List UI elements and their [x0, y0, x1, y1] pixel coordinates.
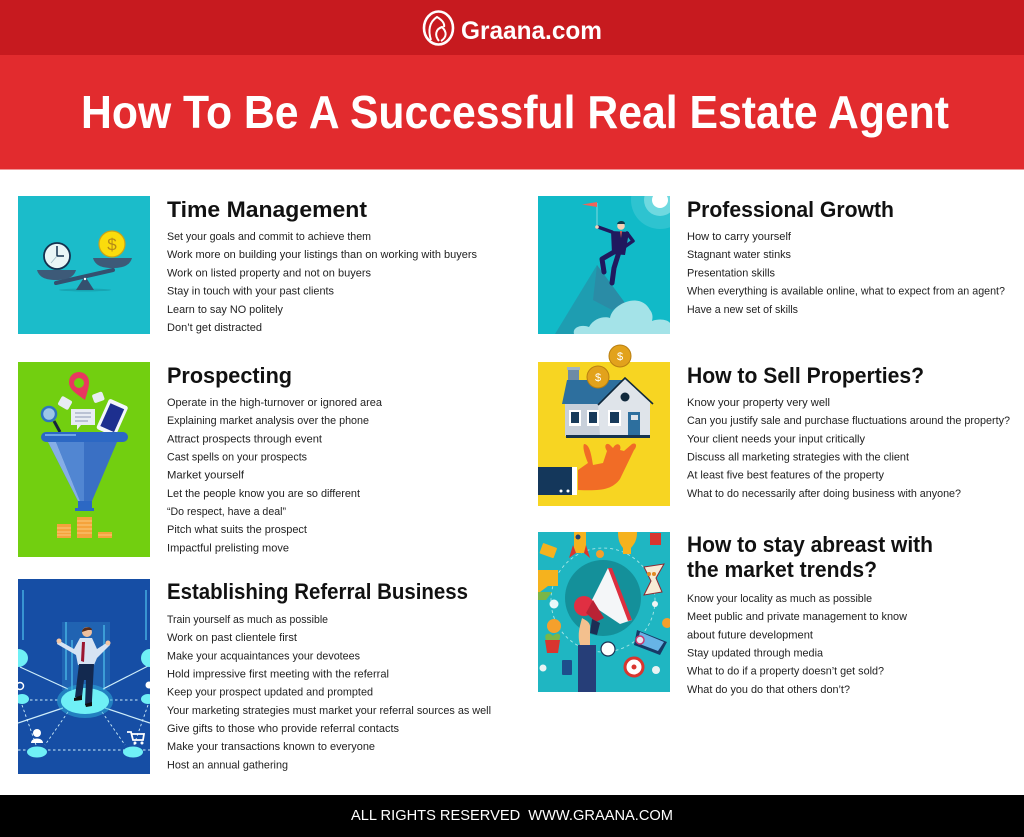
text list: Keep your prospect updated and prompted	[167, 687, 373, 699]
heading: Professional Growth	[687, 197, 894, 222]
panel: Professional Growth	[538, 171, 1005, 334]
text list: Learn to say NO politely	[167, 304, 283, 316]
text list	[167, 231, 477, 334]
text list: Attract prospects through event	[167, 433, 323, 445]
text list: What to do necessarily after doing business with anyone?	[687, 488, 961, 500]
text list: Make your transactions known to everyone	[167, 741, 375, 753]
text list: How to carry yourself	[687, 231, 792, 243]
text list: Your client needs your input critically	[687, 433, 865, 445]
text list: Operate in the high-turnover or ignored area	[167, 397, 383, 409]
text list: Hold impressive first meeting with the referral	[167, 668, 389, 680]
icon: house on a hand with coins: $	[617, 351, 623, 363]
footer bar	[0, 795, 1024, 837]
heading: Time Management	[167, 197, 368, 222]
text list: At least five best features of the property	[687, 470, 884, 482]
heading: the market trends?	[687, 557, 877, 582]
text list: Give gifts to those who provide referral contacts	[167, 723, 399, 735]
heading: How to Sell Properties?	[687, 363, 924, 388]
text list: Explaining market analysis over the phone	[167, 415, 369, 427]
text list: Meet public and private management to know	[687, 611, 908, 623]
panel: How to Sell Properties?	[538, 345, 1010, 506]
text list: When everything is available online, what to expect from an agent?	[687, 286, 1005, 298]
text list: Work more on building your listings than on working with buyers	[167, 249, 477, 261]
text list: What to do if a property doesn’t get sold?	[687, 666, 884, 678]
heading: How to stay abreast with	[687, 532, 933, 557]
icon: scale balancing clock and coin: $	[107, 235, 117, 254]
heading	[687, 532, 933, 582]
heading: Establishing Referral Business	[167, 579, 468, 604]
text list	[687, 231, 1005, 316]
panel: Establishing Referral Business	[8, 579, 491, 774]
header banner	[0, 0, 1024, 170]
text list: Know your property very well	[687, 397, 830, 409]
text list: Discuss all marketing strategies with the client	[687, 452, 910, 464]
text list	[687, 593, 908, 696]
text list	[167, 614, 491, 771]
text list: Don’t get distracted	[167, 322, 262, 334]
text list: Have a new set of skills	[687, 304, 798, 316]
text list: Stay in touch with your past clients	[167, 286, 334, 298]
text list: Pitch what suits the prospect	[167, 524, 308, 536]
logo wordmark: Graana.com	[461, 17, 602, 45]
footer bar: ALL RIGHTS RESERVED WWW.GRAANA.COM	[351, 807, 673, 824]
icon: marketing funnel	[18, 362, 150, 557]
icon: house on a hand with coins	[538, 345, 670, 506]
icon: businessman on mountain peak	[538, 196, 670, 334]
heading: Prospecting	[167, 363, 292, 388]
text list: Presentation skills	[687, 267, 775, 279]
text list: Work on past clientele first	[167, 632, 298, 644]
icon: house on a hand with coins: $	[595, 372, 601, 384]
icon: businessman on network hub	[18, 579, 150, 774]
title: How To Be A Successful Real Estate Agent	[81, 86, 949, 138]
panel: How to stay abreast with the market trends?	[538, 532, 933, 696]
text list: What do you do that others don’t?	[687, 684, 850, 696]
text list: Let the people know you are so different	[167, 488, 361, 500]
panel: Time Management	[18, 196, 477, 334]
text list: “Do respect, have a deal”	[167, 506, 286, 518]
text list: Work on listed property and not on buyers	[167, 267, 371, 279]
text list: about future development	[687, 629, 814, 641]
text list: Cast spells on your prospects	[167, 452, 307, 464]
text list: Train yourself as much as possible	[167, 614, 328, 626]
text list: Set your goals and commit to achieve them	[167, 231, 371, 243]
text list: Stagnant water stinks	[687, 249, 791, 261]
text list	[167, 397, 383, 554]
text list: Can you justify sale and purchase fluctuations around the property?	[687, 415, 1010, 427]
text list: Your marketing strategies must market your referral sources as well	[167, 705, 491, 717]
icon: scale balancing clock and coin	[18, 196, 150, 334]
panel: Prospecting	[18, 362, 383, 557]
text list: Stay updated through media	[687, 648, 824, 660]
text list: Market yourself	[167, 470, 245, 482]
text list	[687, 397, 1010, 500]
text list: Impactful prelisting move	[167, 542, 289, 554]
icon: Graana logo	[424, 12, 453, 44]
text list: Know your locality as much as possible	[687, 593, 872, 605]
text list: Make your acquaintances your devotees	[167, 650, 360, 662]
text list: Host an annual gathering	[167, 759, 288, 771]
icon: megaphone with marketing symbols	[538, 532, 670, 692]
